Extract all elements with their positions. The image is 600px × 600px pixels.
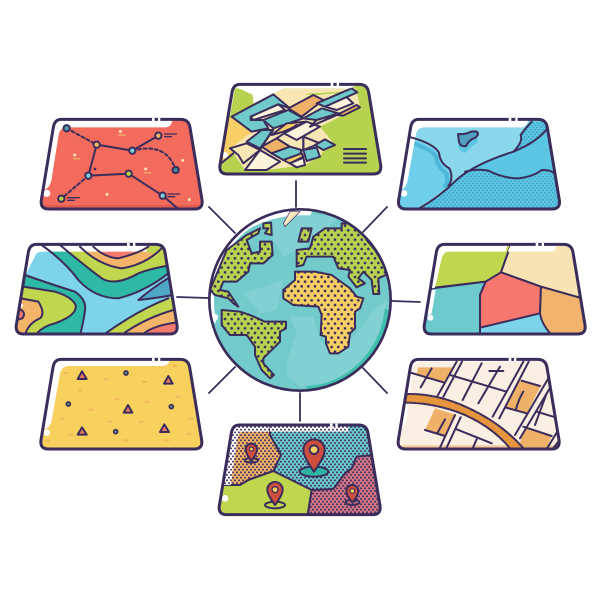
white base bbox=[5, 235, 185, 345]
bottom shade bbox=[44, 205, 200, 208]
teal upper band bbox=[42, 242, 178, 298]
globe outline bbox=[209, 209, 391, 391]
ocean teal crescent bbox=[307, 308, 389, 392]
left green area bbox=[15, 287, 76, 337]
frame bbox=[16, 244, 177, 334]
pin: rose region bbox=[345, 485, 359, 505]
orange band bbox=[80, 242, 165, 268]
highlight spot bbox=[19, 304, 23, 308]
blue base bbox=[415, 120, 546, 208]
coral region bbox=[480, 272, 541, 328]
frame bbox=[219, 425, 380, 515]
dots: teal bbox=[270, 425, 373, 490]
globe bbox=[207, 208, 391, 392]
north island bbox=[298, 228, 312, 242]
white corner bbox=[230, 88, 284, 116]
blue base bbox=[415, 235, 595, 345]
frame bbox=[398, 359, 559, 449]
frame bbox=[220, 84, 381, 174]
frame bbox=[41, 359, 202, 449]
orange region bbox=[217, 422, 281, 487]
right corner green bbox=[147, 242, 172, 255]
red top bbox=[93, 242, 152, 258]
highlight dots bbox=[222, 425, 269, 485]
pin: large bbox=[300, 439, 328, 477]
white highlight bbox=[425, 242, 557, 315]
panel: location pins map bbox=[210, 415, 390, 525]
teal region bbox=[418, 282, 486, 337]
coast shadow bbox=[414, 143, 447, 186]
frame gaps bbox=[330, 424, 338, 428]
teal region bbox=[210, 415, 390, 525]
panel: regions map bbox=[415, 235, 595, 345]
white highlight bbox=[395, 117, 528, 189]
triangles bbox=[78, 371, 173, 435]
white highlight bbox=[235, 86, 355, 89]
ocean bbox=[209, 209, 391, 391]
left red bbox=[17, 309, 24, 320]
frame gaps bbox=[509, 358, 516, 362]
arctic island bbox=[283, 212, 300, 227]
frame gaps bbox=[152, 118, 160, 122]
frame bbox=[424, 244, 585, 334]
side streets bbox=[411, 363, 553, 448]
white highlight with dots bbox=[222, 425, 269, 485]
frame bbox=[41, 119, 202, 209]
corner line bbox=[513, 122, 532, 152]
streets bbox=[438, 362, 562, 449]
cream top area bbox=[252, 88, 357, 105]
road dots bbox=[405, 394, 524, 449]
pin: green region bbox=[265, 482, 285, 508]
marker dashes bbox=[73, 135, 151, 173]
routes bbox=[88, 136, 178, 209]
panel: contour map (topographic) bbox=[5, 235, 185, 345]
left land bbox=[390, 137, 451, 209]
small markers bbox=[73, 130, 191, 201]
panel: network map (red) bbox=[40, 118, 204, 210]
dotted sea floor bbox=[420, 170, 567, 210]
frame bbox=[398, 119, 560, 209]
main road bbox=[405, 394, 524, 449]
dots bbox=[66, 371, 173, 434]
africa bbox=[283, 272, 363, 353]
cream base bbox=[390, 350, 570, 460]
green base bbox=[221, 86, 380, 172]
frame gaps bbox=[509, 118, 518, 122]
point bbox=[94, 168, 96, 170]
orange blocks bbox=[417, 367, 552, 448]
frame gaps bbox=[331, 82, 339, 86]
bottom right orange bbox=[123, 308, 182, 338]
globe white highlight bbox=[207, 208, 313, 323]
white highlight spot bbox=[214, 314, 218, 320]
eurasia bbox=[297, 223, 386, 294]
south america bbox=[222, 310, 286, 378]
left orange bbox=[15, 298, 42, 337]
dotted corner bbox=[515, 122, 550, 152]
panel: terrain map (yellow) bbox=[30, 350, 210, 460]
dots: rose bbox=[307, 455, 390, 518]
right sea bbox=[474, 131, 554, 178]
parcel dots bbox=[247, 108, 338, 161]
green region bbox=[428, 244, 511, 288]
pin: orange region bbox=[245, 444, 258, 463]
lagoon bbox=[138, 278, 173, 300]
parcel diagonal bbox=[218, 125, 303, 166]
rose region bbox=[307, 455, 390, 518]
white top strip bbox=[22, 242, 147, 275]
north america bbox=[210, 228, 273, 307]
map parcels bbox=[230, 88, 360, 170]
orange bottom shade bbox=[390, 445, 570, 450]
frame gaps bbox=[152, 358, 160, 362]
greenland bbox=[263, 223, 272, 235]
parcel cluster underlay bbox=[230, 92, 360, 170]
highlight spot bbox=[401, 190, 407, 197]
island shadow bbox=[458, 137, 478, 153]
frame gaps bbox=[536, 243, 544, 247]
nodes bbox=[58, 125, 179, 202]
yellow base bbox=[30, 350, 210, 460]
white highlight bbox=[37, 357, 170, 429]
highlight spot bbox=[43, 429, 50, 436]
frame gaps bbox=[127, 243, 135, 247]
connector lines bbox=[177, 181, 420, 421]
highlight spot bbox=[222, 152, 228, 158]
white highlight bbox=[395, 357, 527, 430]
top strip dots bbox=[270, 425, 348, 432]
dots: orange bbox=[217, 422, 281, 487]
green upper band bbox=[60, 242, 178, 282]
coast lines bbox=[411, 127, 557, 209]
dashed routes bbox=[61, 128, 176, 199]
ocean lighter patches bbox=[243, 213, 387, 387]
panel: street map bbox=[390, 350, 570, 460]
bottom right green bbox=[105, 297, 182, 338]
light blue area bbox=[22, 252, 185, 338]
highlight spot bbox=[43, 190, 50, 197]
top white strip bbox=[270, 425, 348, 432]
panel: coastline map (blue) bbox=[397, 118, 561, 210]
cream region bbox=[501, 242, 580, 298]
green region bbox=[210, 471, 312, 517]
highlight spot bbox=[222, 495, 228, 502]
bottom right red bbox=[143, 322, 182, 338]
legend lines bbox=[344, 149, 366, 163]
white highlight bbox=[44, 120, 172, 190]
sand marks bbox=[45, 366, 193, 440]
highlight spot bbox=[427, 315, 433, 321]
contour lines bbox=[17, 245, 178, 335]
left teal band bbox=[18, 275, 85, 337]
panel: parcels map (top) bbox=[218, 82, 382, 176]
island bbox=[458, 131, 478, 146]
node labels bbox=[68, 134, 180, 200]
red base bbox=[42, 120, 201, 205]
orange region bbox=[540, 287, 592, 337]
yellow left bbox=[222, 118, 252, 162]
